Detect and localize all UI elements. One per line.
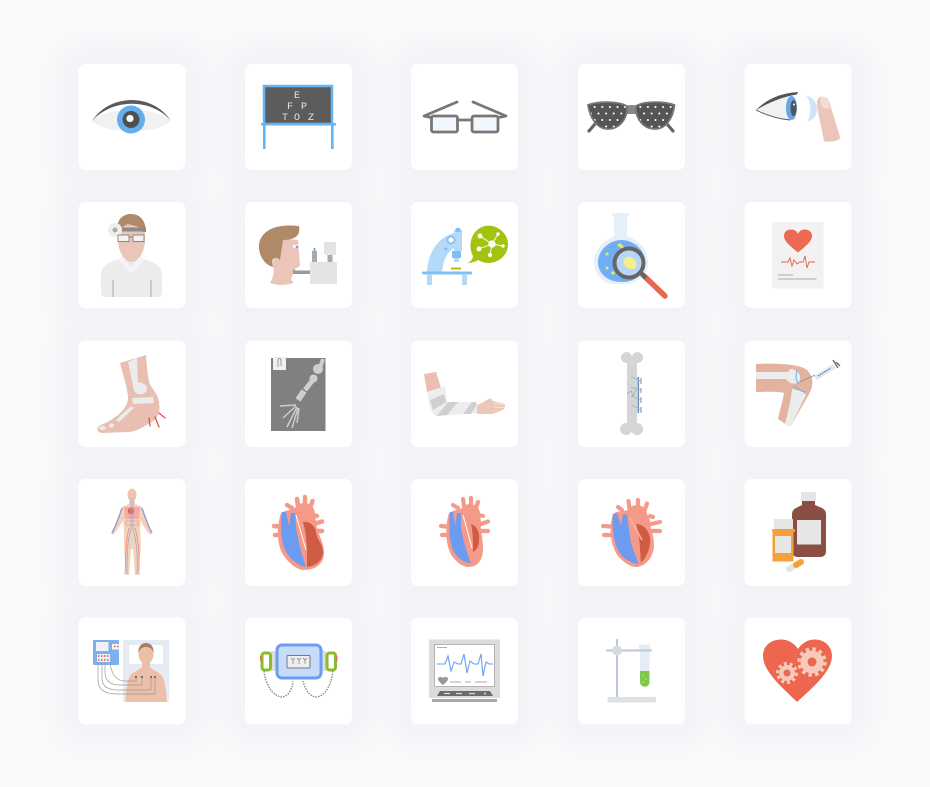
panel: heart three	[578, 479, 685, 586]
icon: eye	[92, 100, 171, 134]
icon: eye chart board: O	[294, 113, 300, 124]
icon: eye chart board	[261, 86, 336, 149]
icon: microscope with speech bubble	[422, 226, 508, 285]
icon: patient breathing into device	[259, 226, 337, 285]
icon: patient with ECG leads	[93, 640, 169, 702]
panel: heart two	[411, 479, 518, 586]
icon: eye with contact lens	[756, 92, 840, 142]
icon: eye chart board: F	[287, 102, 293, 113]
icon: foot bones	[97, 355, 165, 433]
panel: medicine	[744, 479, 852, 586]
panel: circulatory system	[78, 479, 186, 586]
icon: arm x-ray film	[271, 357, 326, 431]
icon: heart with gears	[763, 640, 832, 702]
panel: eye chart	[245, 64, 352, 170]
panel: heart monitor	[411, 618, 518, 724]
icon: heart cross-section large ventricle	[274, 497, 324, 570]
icon: ECG monitor	[429, 640, 500, 702]
icon: doctor with head mirror	[101, 214, 162, 297]
icon: medicine bottles and pill	[772, 492, 826, 569]
panel: ECG patient	[78, 618, 186, 724]
icon: test tube on stand	[606, 639, 656, 702]
icon: flask under magnifier	[594, 213, 665, 296]
icon: fractured femur with plate	[620, 352, 643, 435]
panel: microscope	[411, 202, 518, 308]
panel: defibrillator	[245, 618, 352, 724]
panel: pinhole glasses	[578, 64, 685, 170]
panel: flask	[578, 202, 685, 308]
icon: pinhole glasses	[588, 102, 674, 131]
icon: heart cross-section thick wall	[441, 498, 488, 567]
icon: heart cross-section third	[603, 500, 660, 567]
panel: x-ray	[245, 340, 352, 447]
panel: knee injection	[744, 340, 852, 447]
panel: contact lens	[744, 64, 852, 170]
icon: eye chart board: P	[301, 102, 307, 113]
panel: heart one	[245, 479, 352, 586]
icon: eye chart board: T	[282, 113, 288, 124]
panel: test tube	[578, 618, 685, 724]
icon: human body circulation	[111, 488, 152, 575]
icon: arm in cast	[424, 372, 505, 416]
icon: eye chart board: E	[294, 91, 300, 102]
panel: heart gears	[744, 618, 852, 724]
icon: cardiac report	[772, 222, 824, 288]
panel: foot	[78, 340, 186, 447]
panel: doctor	[78, 202, 186, 308]
panel: glasses	[411, 64, 518, 170]
panel: heart report	[744, 202, 852, 308]
icon: eye chart board: Z	[308, 113, 314, 124]
icon: defibrillator	[260, 645, 338, 697]
icon: glasses	[424, 102, 506, 132]
panel: patient at spirometer	[245, 202, 352, 308]
panel: arm cast	[411, 340, 518, 447]
panel: bone	[578, 340, 685, 447]
icon: knee with syringe	[756, 360, 840, 427]
panel: eye	[78, 64, 186, 170]
